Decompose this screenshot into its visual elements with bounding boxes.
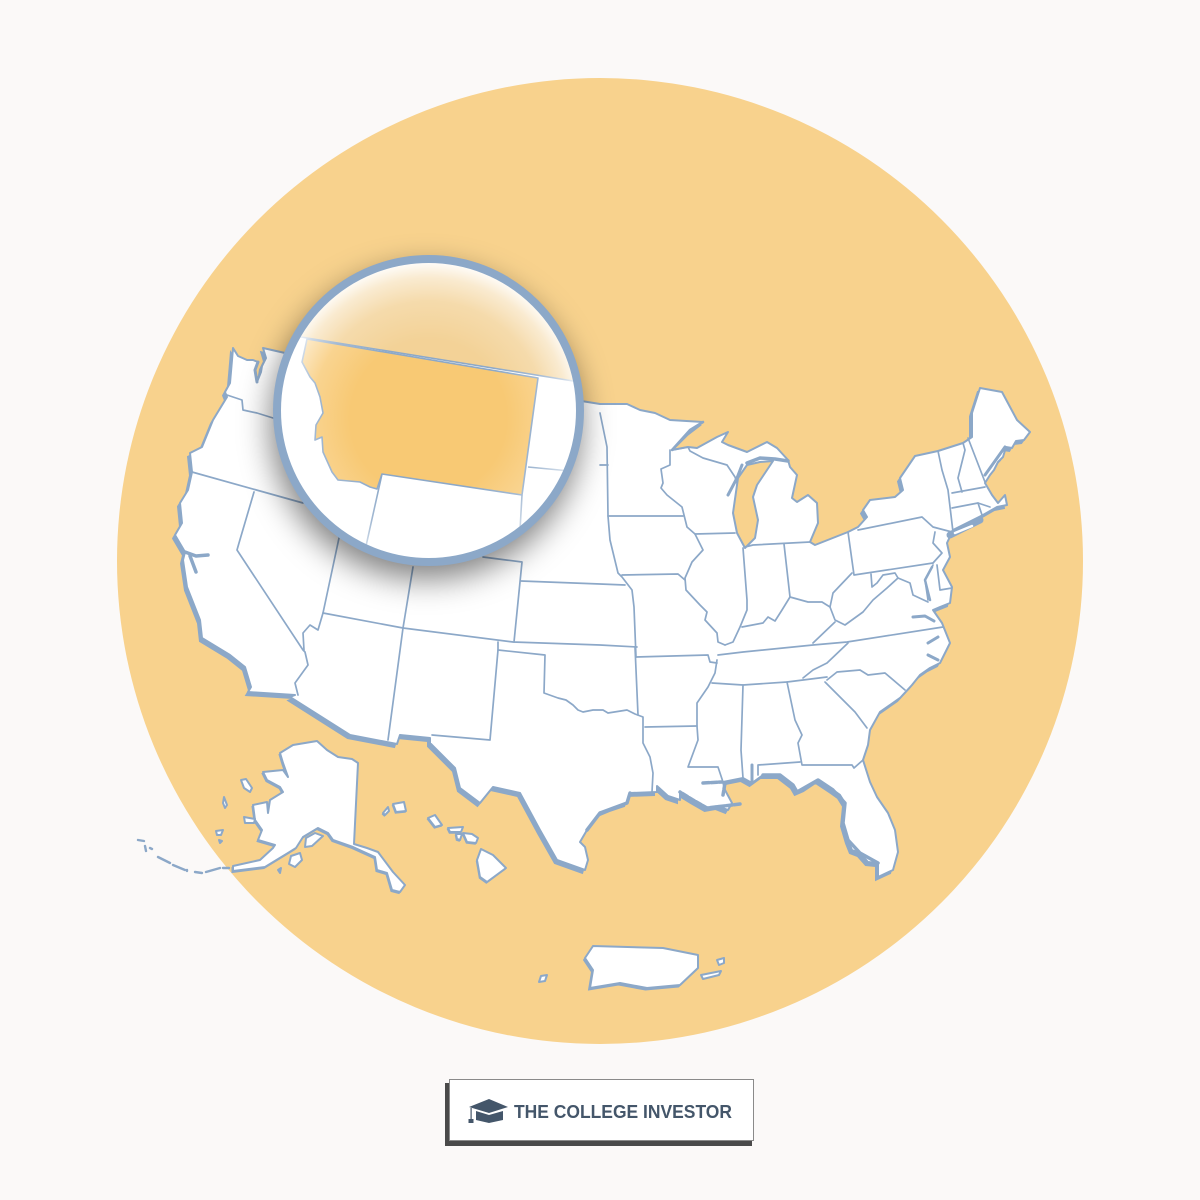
lens backdrop [302,266,572,380]
land inside lens [281,336,576,558]
magnifying glass shadow [271,269,581,579]
Aleutian islands [138,840,229,873]
coast detail [185,362,1005,863]
lens ring [277,259,580,562]
map: Alaska [138,741,405,894]
map: continental United States [172,348,1030,880]
badge box [450,1080,754,1140]
map: Hawaii [382,802,506,883]
lens state borders [366,467,570,546]
logo badge [445,1080,754,1146]
lens glow [300,263,574,544]
icon: graduation cap [468,1099,508,1123]
map: Puerto Rico [539,946,724,990]
Alaskan islands [216,779,323,873]
orange circle backdrop [117,78,1083,1044]
magnifying glass highlighting Montana [270,259,600,570]
lake michigan [733,461,773,548]
Montana [302,339,538,495]
Puerto Rico small islands [539,958,724,982]
state borders [192,395,990,792]
badge shadow [445,1083,752,1146]
brand name: THE COLLEGE INVESTOR [514,1102,732,1122]
